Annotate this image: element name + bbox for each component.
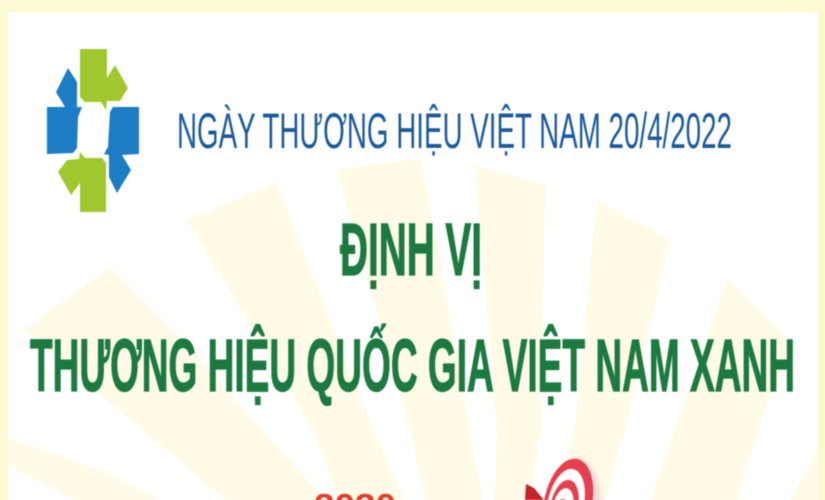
target shadow (553, 457, 601, 500)
icon: dartboard target with arrow (524, 456, 602, 500)
arrow flight (525, 484, 544, 500)
logo arrow: right blue (104, 107, 139, 193)
logo arrow: left blue (47, 68, 82, 154)
title: first line: ĐỊNH VỊ (340, 208, 482, 291)
icon: brand logo of four arrows (47, 49, 139, 212)
background: sunburst rays (8, 158, 818, 500)
logo arrow: bottom green (58, 152, 106, 212)
logo arrow: top green (80, 49, 128, 110)
target rings (535, 454, 601, 500)
